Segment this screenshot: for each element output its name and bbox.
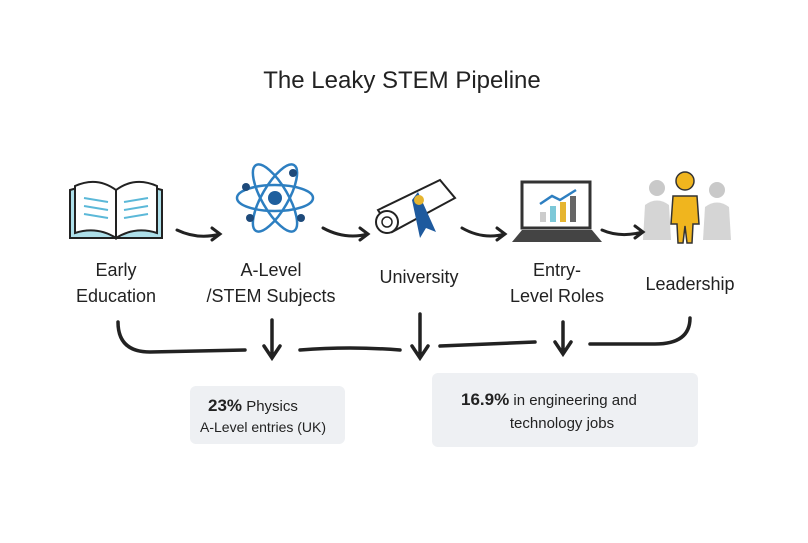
- icon: diploma: [376, 180, 455, 238]
- stage labels: /STEM Subjects: [206, 286, 336, 306]
- callout: physics: A-Level entries (UK): [200, 419, 326, 435]
- callout: physics: 23% Physics: [208, 396, 298, 415]
- callout: engineering jobs: 16.9% in engineering and: [461, 390, 637, 409]
- leak pipeline arrows: [118, 314, 690, 358]
- arrows: between stages: [177, 226, 643, 240]
- icon: leadership people: [643, 172, 731, 243]
- icon: laptop: [512, 182, 602, 242]
- stage labels: Education: [76, 286, 156, 306]
- callout: engineering jobs: [432, 373, 698, 447]
- stage labels: University: [379, 267, 459, 287]
- stage labels: [76, 260, 735, 306]
- callout: engineering jobs: technology jobs: [510, 415, 614, 432]
- title: The Leaky STEM Pipeline: [263, 67, 541, 94]
- stage labels: Early: [95, 260, 137, 280]
- stage labels: Entry-: [533, 260, 581, 280]
- stage labels: A-Level: [240, 260, 302, 280]
- stage labels: Level Roles: [510, 286, 604, 306]
- callout: physics: [190, 386, 345, 444]
- icon: open book: [70, 182, 162, 238]
- icon: atom: [237, 159, 313, 237]
- stage labels: Leadership: [645, 274, 735, 294]
